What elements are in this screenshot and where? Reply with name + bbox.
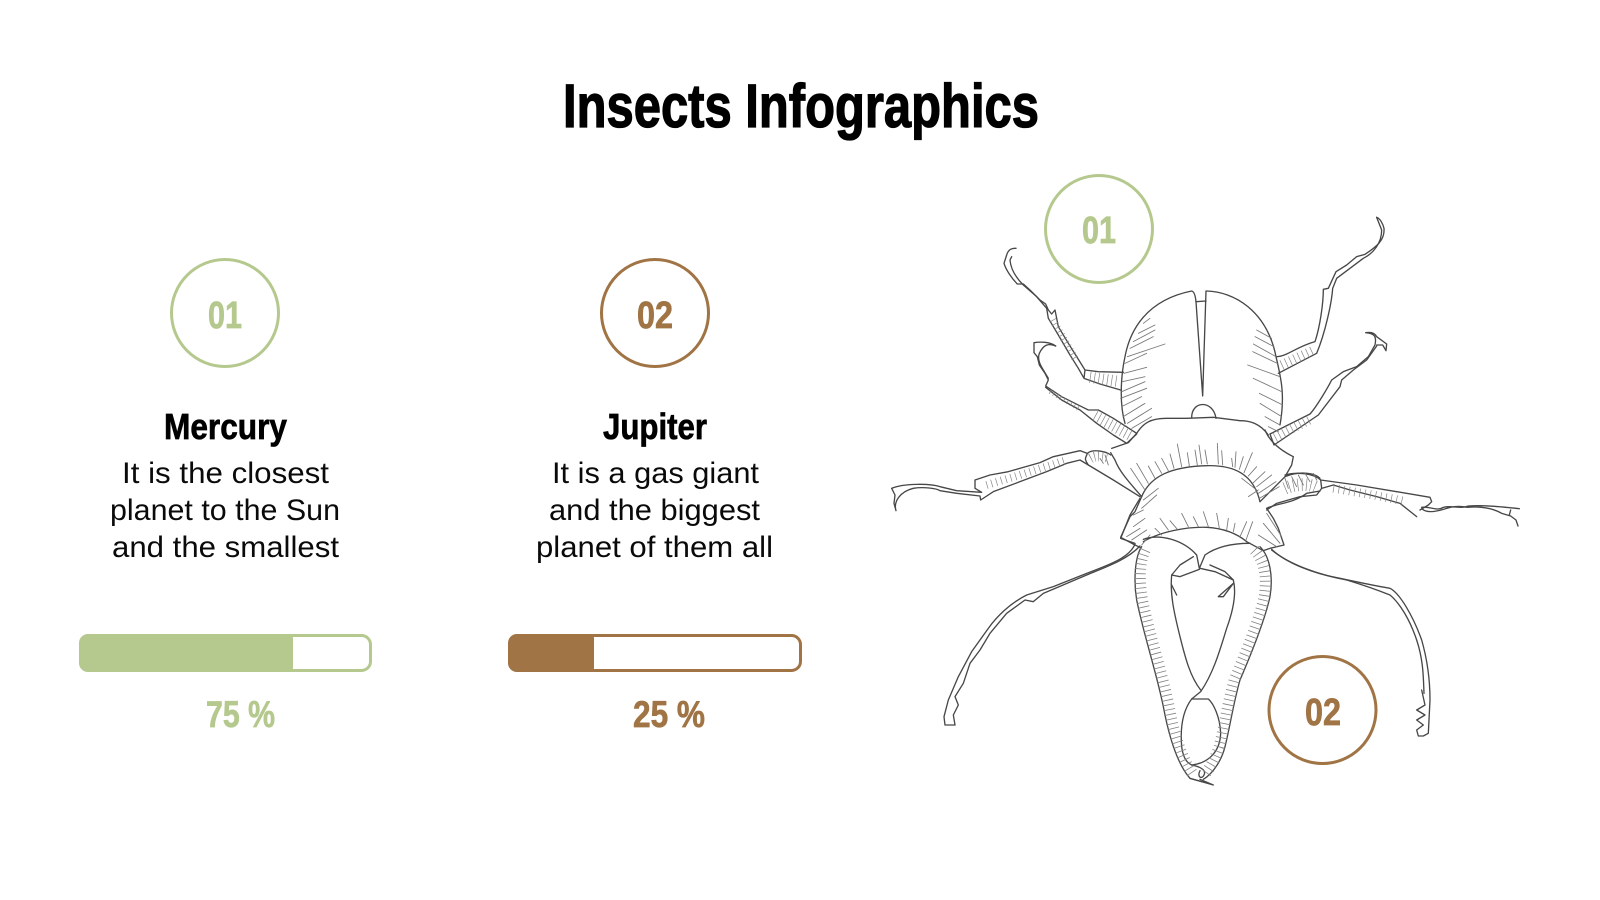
description Mercury: It is the closest [122,457,330,490]
illustration: stag beetle [892,217,1519,785]
beetle right tarsus [1422,506,1519,526]
panel: Jupiter [508,260,800,735]
description Jupiter: and the biggest [549,494,761,527]
beetle right front legs and dome [1207,217,1432,517]
callout badge 01 on beetle: 01 [1082,210,1116,252]
callout badge 02 on beetle [1269,656,1376,764]
description Jupiter: planet of them all [536,531,773,564]
value 75 %: 75 % [206,694,275,735]
beetle left middle leg and hind leg [892,451,1140,725]
badge 01 [172,260,278,366]
description Jupiter: It is a gas giant [552,457,760,490]
badge 02: 02 [637,295,673,337]
callout badge 02 on beetle: 02 [1305,692,1341,734]
title: Insects Infographics [563,72,1039,140]
beetle mandibles [1135,537,1430,785]
description Jupiter [536,457,773,564]
panel: Mercury [79,260,370,735]
description Mercury: and the smallest [112,531,340,564]
progress bar 75 [79,634,370,672]
badge 02 [602,260,708,366]
description Mercury: planet to the Sun [110,494,340,527]
value 25 %: 25 % [633,694,705,735]
progress bar 25 [508,634,800,672]
heading Mercury: Mercury [164,406,287,447]
beetle left legs and dome [1004,248,1240,448]
beetle thorax [1100,430,1320,551]
badge 01: 01 [208,295,242,337]
description Mercury [110,457,340,564]
heading Jupiter: Jupiter [603,406,707,447]
callout badge 01 on beetle [1046,176,1152,282]
